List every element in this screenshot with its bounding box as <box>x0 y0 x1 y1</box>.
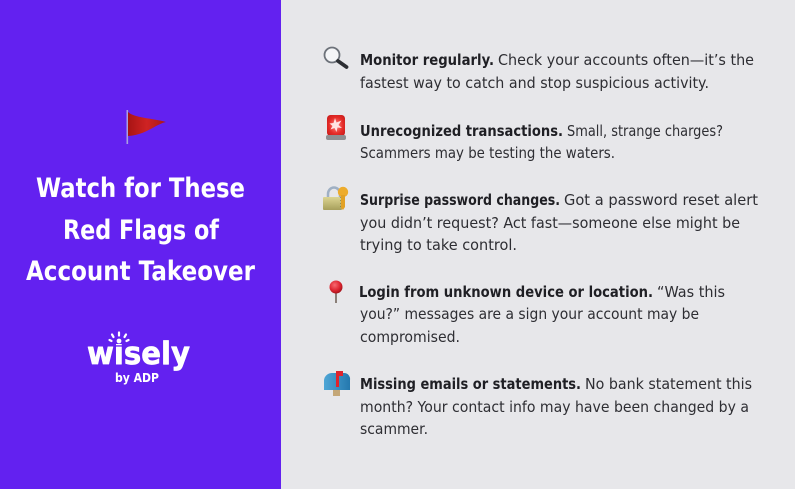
text: surprise password changes <box>360 191 758 254</box>
item: monitor regularly <box>324 48 754 92</box>
item: missing emails or statements <box>324 371 752 438</box>
text: monitor regularly: Check your accounts often—it’s the <box>498 51 754 69</box>
text: surprise password changes: Got a password reset alert <box>564 191 758 209</box>
text: missing emails or statements: No bank statement this <box>585 375 752 393</box>
text: monitor regularly: Monitor regularly. <box>360 51 494 69</box>
title: Account Takeover <box>26 256 256 287</box>
icon: logo sun rays <box>110 332 128 344</box>
text: monitor regularly: fastest way to catch and stop suspicious activity. <box>360 74 709 92</box>
text: surprise password changes: you didn’t request? Act fast—someone else might be <box>360 214 740 232</box>
icon: blue mailbox with red flag <box>324 371 350 396</box>
title: Watch for These <box>36 173 245 204</box>
logo wordmark: wisely <box>87 336 190 372</box>
text: unrecognized transactions: Scammers may be testing the waters. <box>360 144 615 162</box>
icon: padlock with key <box>323 187 348 210</box>
text: surprise password changes: Surprise password changes. <box>360 191 560 209</box>
text: missing emails or statements: scammer. <box>360 420 428 438</box>
text: missing emails or statements: month? Your contact info may have been changed by a <box>360 398 749 416</box>
panel: grey right content area <box>281 0 795 489</box>
title <box>26 173 256 287</box>
title: Red Flags of <box>63 215 219 246</box>
text: missing emails or statements: Missing emails or statements. <box>360 375 581 393</box>
logo byline: by ADP <box>115 371 159 385</box>
text: monitor regularly <box>360 51 754 92</box>
icon: red siren light <box>326 115 346 140</box>
icon: red triangular flag <box>126 110 166 144</box>
logo: wisely by ADP <box>87 332 190 385</box>
text: login from unknown device: “Was this <box>657 283 725 301</box>
item: unrecognized transactions <box>326 115 723 162</box>
item: login from unknown device <box>330 280 725 346</box>
text: login from unknown device: compromised. <box>360 328 460 346</box>
item: surprise password changes <box>323 187 758 254</box>
text: login from unknown device <box>359 283 725 346</box>
text: unrecognized transactions <box>360 122 723 162</box>
text: surprise password changes: trying to take control. <box>360 236 517 254</box>
panel: purple left sidebar <box>0 0 281 489</box>
text: unrecognized transactions: Unrecognized transactions. <box>360 122 563 140</box>
text: unrecognized transactions: Small, strange charges? <box>567 122 723 140</box>
icon: red map pin <box>330 280 342 303</box>
text: missing emails or statements <box>360 375 752 438</box>
icon: magnifying glass <box>324 48 346 67</box>
text: login from unknown device: Login from unknown device or location. <box>359 283 653 301</box>
text: login from unknown device: you?” messages are a sign your account may be <box>360 305 699 323</box>
